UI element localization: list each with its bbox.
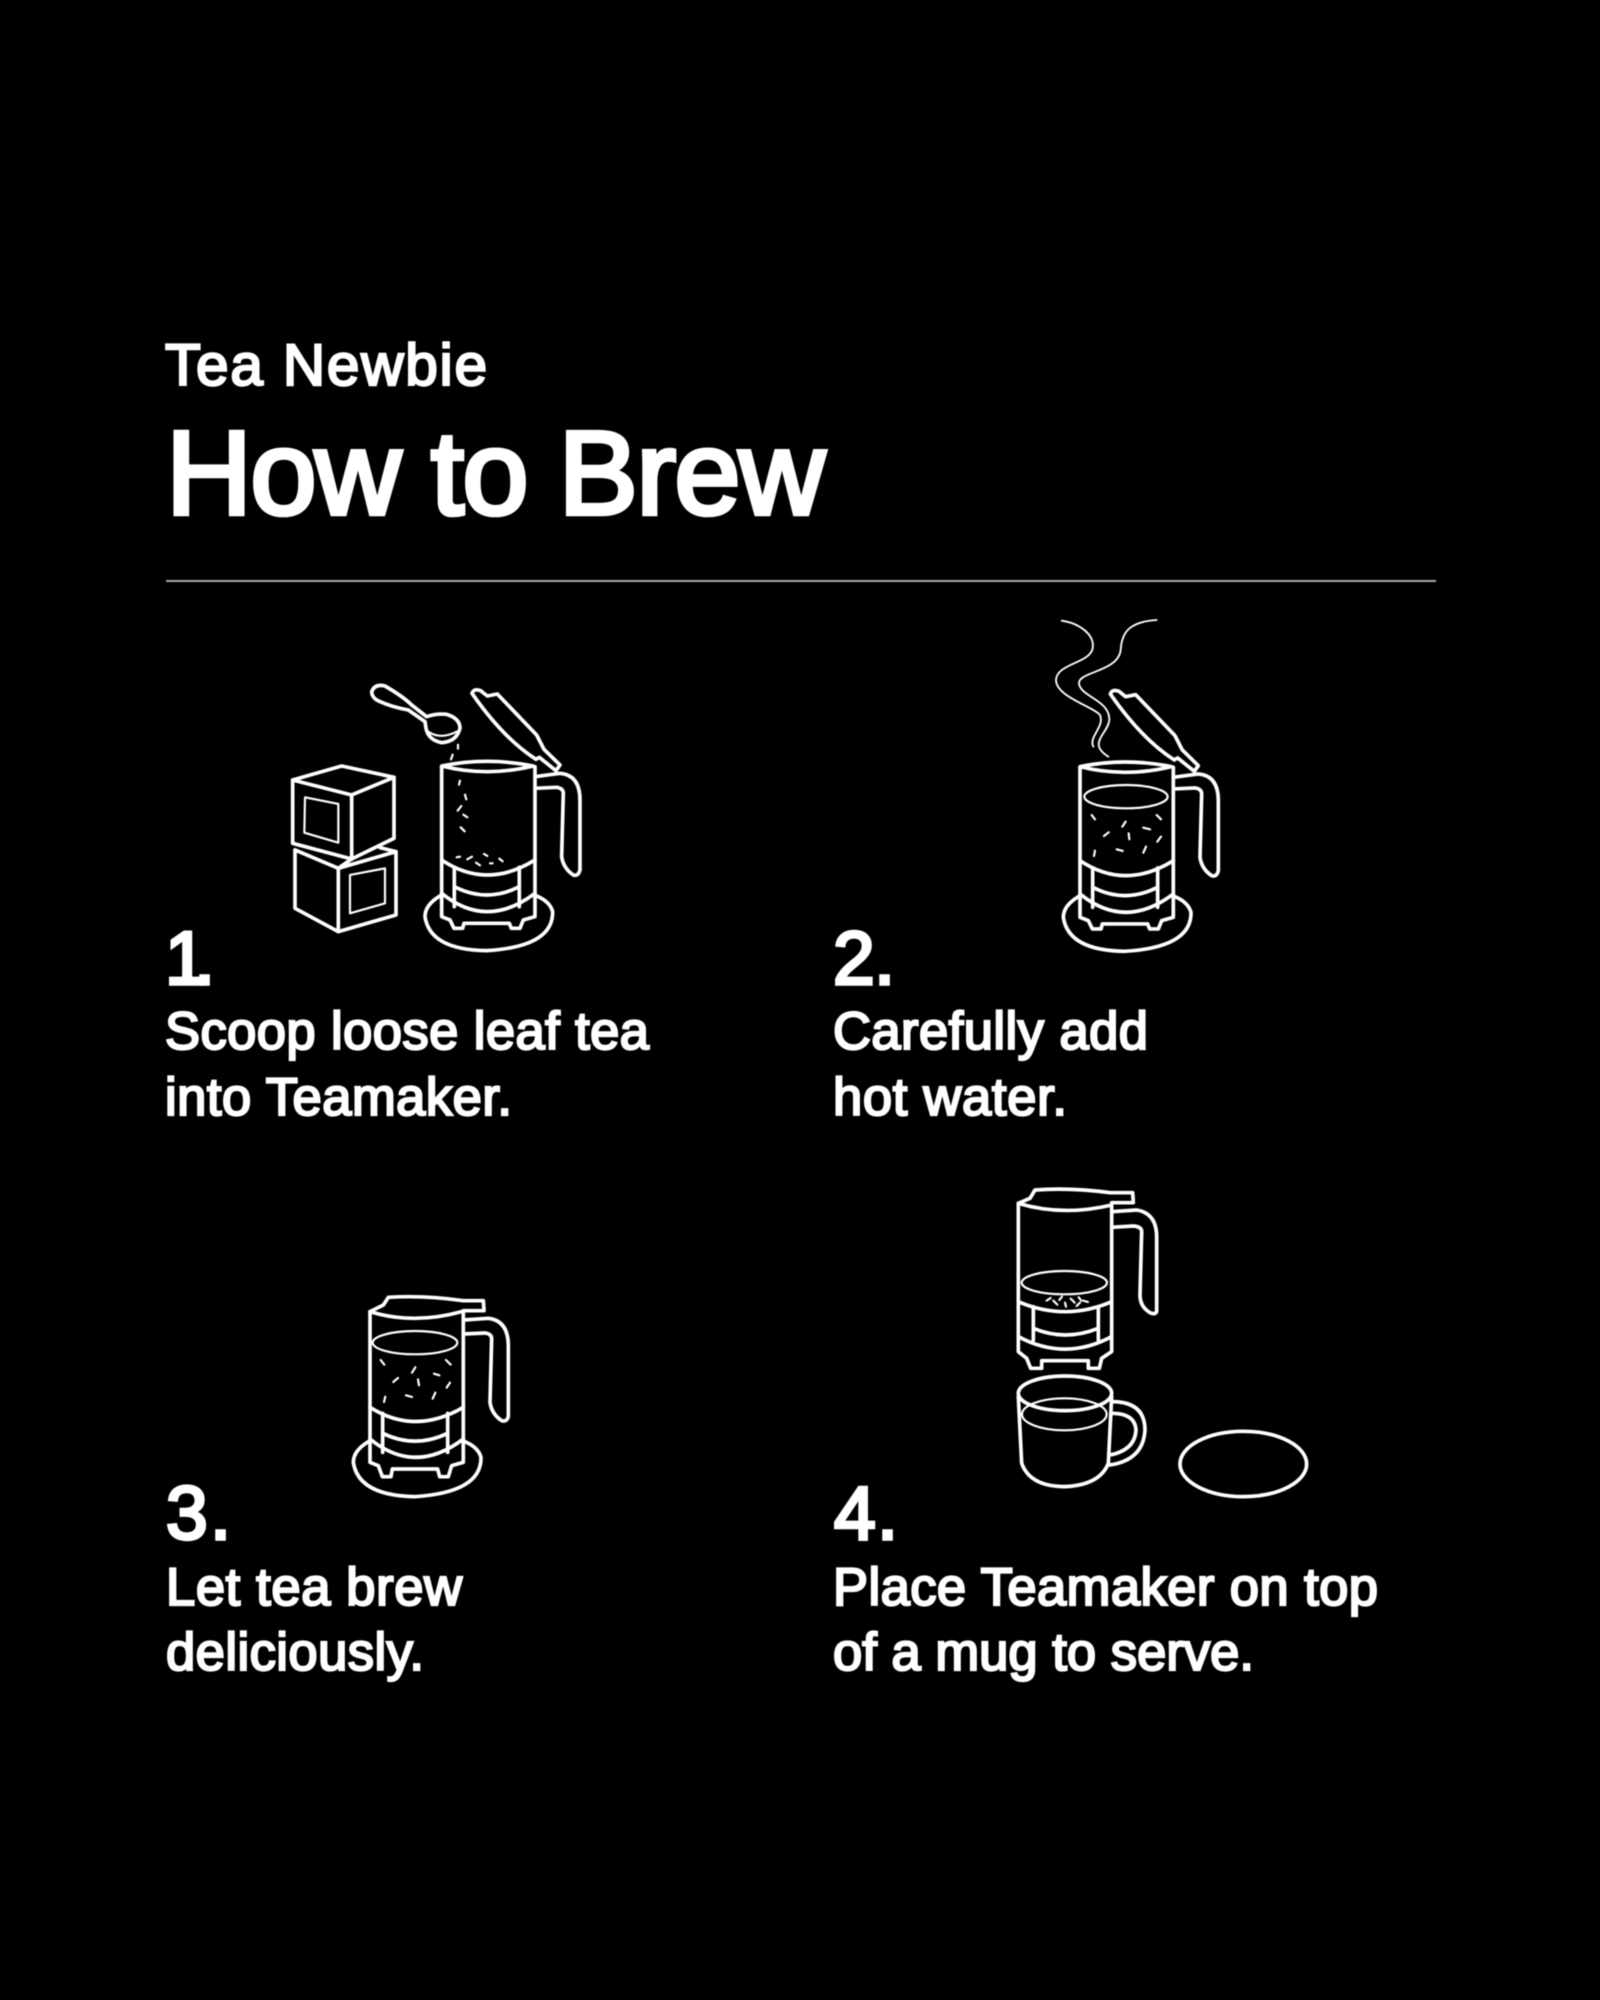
step 1 bbox=[165, 685, 650, 1127]
step 4 text bbox=[833, 1558, 1378, 1682]
icon: teamaker body bbox=[1063, 690, 1218, 951]
icon: tea tins, spoon and open teamaker bbox=[293, 685, 580, 951]
icon: teamaker on mug with coaster bbox=[1018, 1189, 1307, 1497]
step 2 text: Carefully add bbox=[833, 1002, 1148, 1061]
icon: teamaker closed, brewing bbox=[353, 1297, 508, 1497]
step 4 bbox=[833, 1189, 1378, 1682]
icon: tea leaves bbox=[381, 1360, 451, 1402]
subtitle: Tea Newbie bbox=[165, 333, 487, 398]
step 1 text bbox=[165, 1002, 650, 1127]
step number 2: 2. bbox=[833, 916, 895, 1000]
step 3 bbox=[166, 1297, 508, 1682]
icon: teamaker body bbox=[353, 1297, 508, 1497]
step number 3: 3. bbox=[166, 1471, 231, 1555]
icon: upper tea tin bbox=[293, 766, 394, 859]
step 2 text bbox=[833, 1002, 1148, 1127]
step 3 text: deliciously. bbox=[166, 1623, 424, 1682]
icon: tea leaves bbox=[1092, 815, 1161, 856]
icon: teamaker body bbox=[1018, 1189, 1157, 1368]
icon: lower tea tin bbox=[295, 848, 396, 932]
icon: falling tea leaves bbox=[457, 781, 503, 865]
icon: water surface bbox=[1022, 1271, 1107, 1294]
step 4 text: of a mug to serve. bbox=[833, 1623, 1254, 1682]
icon: teamaker body bbox=[425, 690, 580, 951]
icon: wet tea leaves bbox=[1047, 1297, 1088, 1307]
step number 1: 1. bbox=[165, 916, 215, 1000]
step 2 bbox=[833, 620, 1218, 1127]
icon: steam bbox=[1056, 620, 1157, 757]
step 4 text: Place Teamaker on top bbox=[833, 1558, 1378, 1617]
icon: mug bbox=[1018, 1376, 1145, 1487]
icon: teamaker with hot water and steam bbox=[1056, 620, 1218, 951]
step 3 text: Let tea brew bbox=[166, 1558, 463, 1617]
step number 4: 4. bbox=[834, 1471, 898, 1555]
icon: water surface bbox=[1084, 785, 1168, 808]
step 3 text bbox=[166, 1558, 463, 1682]
title: How to Brew bbox=[166, 407, 826, 540]
step 1 text: Scoop loose leaf tea bbox=[165, 1002, 650, 1061]
icon: spoon bbox=[372, 685, 460, 759]
icon: coaster bbox=[1180, 1431, 1307, 1497]
step 2 text: hot water. bbox=[833, 1068, 1067, 1127]
step 1 text: into Teamaker. bbox=[165, 1068, 512, 1127]
icon: water surface bbox=[373, 1331, 457, 1354]
